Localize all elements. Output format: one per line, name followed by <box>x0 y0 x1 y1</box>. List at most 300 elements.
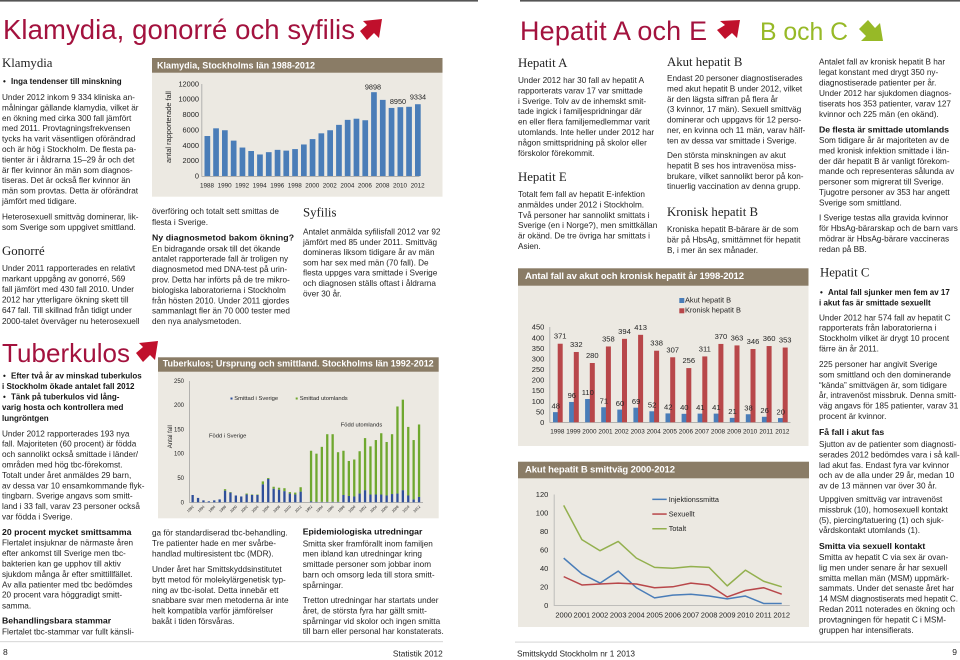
text block: Epidemiologiska utredningar: Tretton utredningar har startats under <box>303 596 439 605</box>
panel: Akut hepatit B line chart: 2005 <box>646 610 663 619</box>
panel: Klamydia bar chart: 1988 <box>200 182 214 189</box>
text block: Akut hepatit B: ten av dessa var smittade i Sverige. <box>667 136 797 145</box>
text block: Hepatit C: smitta mellan män (MSM) uppmärk- <box>819 574 949 583</box>
panel: Tuberkulos bar chart: 1994 <box>197 505 206 513</box>
panel: Akut hepatit B line chart: 2009 <box>719 610 736 619</box>
panel: Klamydia bar chart: Klamydia, Stockholms län 1988-2012 <box>157 61 315 71</box>
text block: Klamydia <box>1 56 139 232</box>
text block: Ny diagnosmetod: biologiska laboratorierna i Stockholm <box>152 286 286 295</box>
panel: Hepatit B bar chart: 69 <box>632 397 640 406</box>
text block: Hepatit A: förskolor förekommit. <box>518 149 594 158</box>
text block: Tuberkulos: bakterien kan ge upphov till aktiv <box>2 560 122 568</box>
panel: Tuberkulos bar chart: 2008 <box>391 505 400 513</box>
text block: Hepatit C: Sjutton av de patienter som diagnosti- <box>819 440 957 449</box>
panel: Klamydia bar chart: 1996 <box>270 182 285 189</box>
text block: Hepatit C: lad akut fas. Endast fyra var kvinnor <box>819 461 949 470</box>
panel: Hepatit B bar chart: Kronisk hepatit B <box>685 306 741 315</box>
panel: Tuberkulos bar chart: 200 <box>174 403 185 409</box>
text block: Gonorré: Under 2011 rapporterades en relativt <box>2 264 136 273</box>
text block: Kronisk hepatit B: bär på HbsAg, smittämnet för hepatit <box>667 234 801 244</box>
panel: Klamydia bar chart: 10000 <box>178 95 199 104</box>
text block: Hepatit C: provtagningen för hepatit C i MSM- <box>819 615 946 624</box>
text block: tbc-behandling: Tre patienter hade en mer svårbe- <box>152 538 276 548</box>
panel: Hepatit B bar chart: 450 <box>532 323 544 332</box>
text block: Hepatit E: är okänd. De tre övriga har smittats i <box>518 232 650 241</box>
panel: Klamydia bar chart: 4000 <box>183 141 199 150</box>
panel: Tuberkulos bar chart: 2004 <box>251 505 260 513</box>
text block: kronisk hepatit B, smittade utomlands: Under 2012 har sjukdomen diagnos- <box>819 89 952 98</box>
text block: Gonorré: fall jämfört med 430 fall 2010. Under <box>2 285 134 294</box>
text block: Ny diagnosmetod: den nya analysmetoden. <box>152 317 241 326</box>
panel: Hepatit B bar chart: 311 <box>699 344 711 353</box>
text block: kronisk hepatit B, smittade utomlands: der där hepatit B är vanligt förekom- <box>819 157 950 166</box>
text block: Epidemiologiska utredningar <box>303 527 444 636</box>
panel: Hepatit B bar chart: 394 <box>618 327 631 336</box>
text block: Hepatit C: Under 2012 har 574 fall av hepatit C <box>819 313 951 322</box>
text block: tbc-behandling <box>152 529 289 626</box>
panel: Klamydia bar chart <box>152 58 442 197</box>
text block: Tuberkulos: • <box>3 372 6 381</box>
text block: Tuberkulos: Flertalet tbc-stammar var fullt känsli- <box>2 628 134 637</box>
text block: Syfilis: som har sex med män (70 fall). De <box>303 258 429 267</box>
text block: kronisk hepatit B, smittade utomlands: för HbsAg-bärarskap och de barn vars <box>819 224 958 233</box>
panel: Akut hepatit B line chart: 2012 <box>773 610 790 619</box>
text block: Hepatit C: (5), piercing/tatuering (1) och sjuk- <box>819 516 944 525</box>
text block: tbc-behandling: ga för standardiserad tbc-behandling. <box>152 529 288 538</box>
text block: Ny diagnosmetod: diagnosmetod med DNA-test på urin- <box>152 264 287 274</box>
panel: Akut hepatit B line chart: 2008 <box>701 610 717 619</box>
text block: kronisk hepatit B, smittade utomlands: De flesta är smittade utomlands <box>819 124 949 134</box>
text block: Tuberkulos: områden med hög tbc-förekomst. <box>2 460 123 470</box>
panel: Tuberkulos bar chart: Smittad utomlands <box>300 396 348 402</box>
panel: Hepatit B bar chart: 40 <box>680 403 689 412</box>
text block: Hepatit C: och av de alla under 29 år, medan 10 <box>819 470 955 480</box>
panel: Hepatit B bar chart: 38 <box>744 404 753 412</box>
panel: Tuberkulos bar chart: 2012 <box>413 505 421 513</box>
text block: Kronisk hepatit B: Kronisk hepatit B <box>667 205 758 219</box>
panel: Hepatit B bar chart: 2002 <box>614 429 629 436</box>
panel: Hepatit B bar chart: 300 <box>532 354 544 364</box>
text block: Kronisk hepatit B: B, i mer än sex månader. <box>667 245 758 255</box>
text block: Akut hepatit B <box>667 55 805 191</box>
panel: Akut hepatit B line chart: 40 <box>540 564 548 573</box>
text block: Klamydia: Inga tendenser till minskning <box>11 77 122 86</box>
text block: Hepatit C: vårdskontakt utomlands (1). <box>819 525 920 535</box>
text block: Hepatit C: Antal fall sjunker men fem av 17 <box>828 288 950 297</box>
text block: Hepatit A: tade ingick i familjespridningar där <box>518 107 642 116</box>
text block: Tuberkulos: fall. Majoriteten (60 procent) är födda <box>2 440 137 449</box>
panel: Tuberkulos bar chart <box>158 357 439 518</box>
panel: Tuberkulos bar chart: 2006 <box>262 505 270 513</box>
text block: Gonorré: 2000-talet överväger nu heterosexuell <box>2 317 140 326</box>
text block: Gonorré: Gonorré <box>2 244 45 258</box>
panel: Hepatit B bar chart: 60 <box>616 399 624 408</box>
text block: Tuberkulos: sjukdom många år efter smittillfället. <box>2 569 133 579</box>
icon: red up arrow hepatitis <box>717 20 740 39</box>
text block: Hepatit C: färre än år 2011. <box>819 344 879 354</box>
panel: Klamydia bar chart: 1990 <box>218 182 232 189</box>
text block: kronisk hepatit B, smittade utomlands: kvinnor och 225 män (en okänd). <box>819 110 939 119</box>
panel: Akut hepatit B line chart: Totalt <box>669 524 686 533</box>
panel: Hepatit B bar chart: 353 <box>779 336 792 344</box>
text block: Gonorré <box>2 244 140 326</box>
text block: Tuberkulos: Tänk på tuberkulos vid lång- <box>11 393 120 402</box>
panel: Klamydia bar chart: 2000 <box>305 182 320 189</box>
text block: Hepatit E: Totalt fem fall av hepatit E-infektion <box>518 190 645 199</box>
text block: Ny diagnosmetod: överföring och totalt sett smittas de <box>152 207 279 216</box>
text block: Hepatit C: Stockholm vilket är drygt 10 procent <box>819 334 950 343</box>
panel: Klamydia bar chart: 2010 <box>393 182 407 189</box>
text block: Epidemiologiska utredningar: men ibland kan utredningar kring <box>303 550 422 559</box>
text block: Kronisk hepatit B <box>667 205 801 255</box>
panel: Hepatit B bar chart: 100 <box>532 397 544 406</box>
text block: tbc-behandling: snabbare svar men metoderna är inte <box>152 596 289 605</box>
panel: Akut hepatit B line chart: Injektionssmitta <box>669 495 720 504</box>
text block: Hepatit C: i akut fas är smittade sexuellt <box>819 299 931 308</box>
text block: kronisk hepatit B, smittade utomlands: Som tidigare år är majoriteten av de <box>819 135 950 145</box>
panel: Tuberkulos bar chart: 2000 <box>348 505 356 513</box>
text block: Tuberkulos: • <box>3 393 6 402</box>
text block: Hepatit C: serades 2012 bedömdes vara i så kall- <box>819 449 960 459</box>
heading: Tuberkulos: Tuberkulos <box>2 338 130 368</box>
text block: Hepatit A <box>518 56 654 158</box>
panel: Hepatit B bar chart: Akut hepatit B <box>685 295 731 304</box>
panel: Hepatit B bar chart: 110 <box>582 388 594 397</box>
panel: Hepatit B bar chart: 48 <box>551 401 560 410</box>
text block: Klamydia: målningar gällande klamydia, vilket är <box>2 102 139 112</box>
panel: Hepatit B bar chart: 332 <box>570 340 583 349</box>
text block: Hepatit C: 225 personer har angivit Sverige <box>819 360 938 369</box>
text block: tbc-behandling: helt kompatibla varför jämförelser <box>152 607 273 616</box>
text block: Hepatit C: gruppen har intensifierats. <box>819 626 914 635</box>
panel: Klamydia bar chart: 9898 <box>365 82 381 91</box>
panel: Akut hepatit B line chart: 60 <box>540 546 548 554</box>
footer: Statistik 2012: Statistik 2012 <box>393 649 443 659</box>
panel: Akut hepatit B line chart: 0 <box>544 601 548 610</box>
panel: Hepatit B bar chart: 71 <box>600 396 608 406</box>
text block: Klamydia: som Sverige som uppgivet smittland. <box>2 223 136 232</box>
panel: Hepatit B bar chart <box>518 268 808 446</box>
panel: Klamydia bar chart: 12000 <box>178 79 199 88</box>
panel: Hepatit B bar chart: 280 <box>586 351 599 360</box>
text block: Hepatit E: Sverige (en i Norge?), men smittkällan <box>518 221 658 230</box>
panel: Tuberkulos bar chart: Smittad i Sverige <box>234 396 278 402</box>
panel: Hepatit B bar chart: 2000 <box>582 429 597 436</box>
text block: Kronisk hepatit B: Kroniska hepatit B-bärare är de som <box>667 225 799 234</box>
panel: Akut hepatit B line chart: 120 <box>536 490 548 499</box>
text block: Tuberkulos: 20 procent vara höggradigt smitt- <box>2 591 122 600</box>
text block: tbc-behandling: bakåt i tiden försvåras. <box>152 616 234 626</box>
text block: Akut hepatit B: Den största minskningen av akut <box>667 151 787 160</box>
text block: Klamydia: tiseras. Det är också fler kvinnor än <box>2 175 131 185</box>
text block: Akut hepatit B: Endast 20 personer diagnostiserades <box>667 74 803 83</box>
text block: Tuberkulos: Av alla patienter med tbc bedömdes <box>2 580 132 589</box>
text block: Ny diagnosmetod: prov. Detta har införts på de tre mikro- <box>152 274 290 284</box>
panel: Hepatit B bar chart: 371 <box>554 332 567 341</box>
panel: Hepatit B bar chart: 96 <box>568 391 576 400</box>
panel: Akut hepatit B line chart: 100 <box>536 508 548 518</box>
panel: Hepatit B bar chart: 400 <box>532 333 544 342</box>
panel: Hepatit B bar chart: 2007 <box>695 429 709 436</box>
panel: Klamydia bar chart: 2008 <box>375 182 390 189</box>
panel: Tuberkulos bar chart: 2008 <box>273 505 281 513</box>
panel: Tuberkulos bar chart: 2002 <box>359 505 367 513</box>
panel: Tuberkulos bar chart: 2000 <box>229 505 238 513</box>
title: Hepatit A och E: Hepatit A och E <box>520 16 707 46</box>
text block: Hepatit A: rapporterats varav 17 var smittade <box>518 86 643 95</box>
text block: Hepatit A: någon smittspridning på skolor eller <box>518 137 647 147</box>
text block: Tuberkulos: varig hosta och kontrollera med <box>2 403 123 412</box>
panel: Klamydia bar chart: 2012 <box>411 182 425 189</box>
panel: Hepatit B bar chart: 150 <box>532 386 544 395</box>
text block: Tuberkulos: Efter två år av minskad tuberkulos <box>11 372 142 381</box>
text block: Tuberkulos: Behandlingsbara stammar <box>2 616 112 626</box>
text block: kronisk hepatit B, smittade utomlands: med kronisk infektion smittade i län- <box>819 146 949 155</box>
panel: Hepatit B bar chart: 363 <box>731 333 743 342</box>
text block: Tuberkulos: efter ankomst till Sverige men tbc- <box>2 549 126 558</box>
panel: Akut hepatit B line chart: 20 <box>540 582 548 592</box>
text block: kronisk hepatit B, smittade utomlands: Antalet fall av kronisk hepatit B har <box>819 58 945 67</box>
text block: kronisk hepatit B, smittade utomlands: mande och representeras sålunda av <box>819 166 955 176</box>
text block: Ny diagnosmetod: antalet rapporterade fall är troligen ny <box>152 255 289 264</box>
panel: Hepatit B bar chart: 2001 <box>598 429 613 436</box>
text block: Hepatit C <box>819 266 960 635</box>
text block: Ny diagnosmetod: sammanlagt fler än 70 000 tester med <box>152 307 290 316</box>
text block: Hepatit C: Redan 2011 noterades en ökning och <box>819 605 955 614</box>
panel: Hepatit B bar chart: Antal fall av akut och kronisk hepatit år 1998-2012 <box>525 271 744 282</box>
text block: Hepatit C: Smitta via sexuell kontakt <box>819 541 925 551</box>
panel: Tuberkulos bar chart: 2012 <box>294 505 303 513</box>
panel: Hepatit B bar chart: 360 <box>763 334 775 343</box>
title: B och C: B och C <box>760 19 848 46</box>
panel: Tuberkulos bar chart: Född utomlands <box>341 423 382 429</box>
text block: Hepatit A: i Sverige. Tolv av de inhemskt smit- <box>518 97 646 106</box>
text block: Klamydia: jämfört med tidigare. <box>1 197 77 206</box>
panel: Tuberkulos bar chart: 1998 <box>337 505 346 513</box>
text block: kronisk hepatit B, smittade utomlands: legat konstant med drygt 350 ny- <box>819 68 939 77</box>
text block: Tuberkulos: samma. <box>2 601 31 610</box>
text block: Gonorré: 2012 har ytterligare ökning skett till <box>2 296 129 305</box>
text block: kronisk hepatit B, smittade utomlands: mödrar är HbsAg-bärare vaccineras <box>819 234 949 244</box>
text block: Klamydia: tycks ha varit väsentligen oförändrad <box>2 135 136 144</box>
text block: Hepatit A: Under 2012 har 30 fall av hepatit A <box>518 76 645 85</box>
text block: Hepatit C: Smitta av hepatit C via sex är ovan- <box>819 553 949 562</box>
panel: Hepatit B bar chart: 2004 <box>647 429 661 436</box>
text block: Tuberkulos: och sannolikt också smittade i länder/ <box>2 449 139 459</box>
panel: Akut hepatit B line chart: 2004 <box>628 610 645 619</box>
text block: Gonorré: 647 fall. Till skillnad från tidigt under <box>2 305 132 315</box>
text block: Akut hepatit B: med akut hepatit B under 2012, vilket <box>667 84 803 93</box>
panel: Hepatit B bar chart: 338 <box>650 339 663 348</box>
panel: Klamydia bar chart: 0 <box>195 172 199 181</box>
panel: Tuberkulos bar chart: Antal fall <box>168 425 174 448</box>
panel: Hepatit B bar chart: 21 <box>728 407 737 416</box>
text block: Akut hepatit B: (3 kvinnor, 17 män). Sexuell smittväg <box>667 105 802 114</box>
panel: Hepatit B bar chart: 256 <box>682 356 695 365</box>
text block: Tuberkulos: i Stockholm ökade antalet fall 2012 <box>2 382 135 391</box>
panel: Klamydia bar chart: 2004 <box>340 182 355 189</box>
panel: Tuberkulos bar chart: 1992 <box>305 505 313 513</box>
footer: Smittskydd Stockholm: Smittskydd Stockholm nr 1 2013 <box>517 649 635 659</box>
text block: Tuberkulos: Flertalet insjuknar de närmaste åren <box>2 538 134 548</box>
text block: Klamydia: Heterosexuell smittväg dominerar, lik- <box>2 213 139 222</box>
panel: Hepatit B bar chart: 0 <box>540 418 544 427</box>
panel: Hepatit B bar chart: 2008 <box>711 429 726 436</box>
text block: Akut hepatit B: ner, en kvinna och 11 män, varav hälf- <box>667 126 805 135</box>
panel: Hepatit B bar chart: 42 <box>664 403 672 412</box>
text block: Akut hepatit B: brukare, vilket sannolikt beror på kon- <box>667 171 804 181</box>
text block: Akut hepatit B: dominerar och uppgavs för 12 perso- <box>667 116 802 125</box>
title: Klamydia, gonorré och syfilis: Klamydia, gonorré och syfilis <box>3 14 355 45</box>
text block: Epidemiologiska utredningar: Epidemiologiska utredningar <box>303 527 423 537</box>
text block: Ny diagnosmetod: flesta i Sverige. <box>152 218 208 227</box>
text block: tbc-behandling: handlad multiresistent tbc (MDR). <box>152 550 274 558</box>
panel: Klamydia bar chart: 6000 <box>183 125 199 134</box>
text block: Klamydia: Under 2012 inkom 9 334 kliniska an- <box>2 93 135 102</box>
text block: Akut hepatit B: hepatit B ses hos intravenösa miss- <box>667 161 797 170</box>
text block: Hepatit C: “kända” smittvägen är, som tidigare <box>819 381 947 390</box>
icon: red arrow tuberkulos <box>136 341 158 362</box>
panel: Tuberkulos bar chart: 2002 <box>240 505 249 513</box>
panel: Akut hepatit B line chart: 2010 <box>737 610 754 619</box>
text block: Syfilis: och diagnosen ställs oftast i åldrarna <box>303 278 436 288</box>
text block: Tuberkulos <box>2 372 145 637</box>
text block: Epidemiologiska utredningar: Smitta sker framförallt inom familjen <box>303 539 433 548</box>
text block: Syfilis: Antalet anmälda syfilisfall 2012 var 92 <box>303 228 441 236</box>
panel: Akut hepatit B line chart: 2001 <box>574 610 590 619</box>
panel: Tuberkulos bar chart: 50 <box>177 476 185 482</box>
footer: page 8: 8 <box>3 647 8 657</box>
text block: kronisk hepatit B, smittade utomlands <box>819 58 958 254</box>
text block: Hepatit A: utomlands. Inte heller under 2012 har <box>518 128 654 137</box>
text block: Hepatit C: sammats. Under det senaste året har <box>819 583 954 593</box>
text block: Hepatit C: lig men under senare år har sexuell <box>819 562 948 572</box>
text block: Epidemiologiska utredningar: spårningar. <box>303 580 343 590</box>
text block: Hepatit C: av de 13 männen var över 30 år. <box>819 481 937 491</box>
panel: Hepatit B bar chart: 2009 <box>727 429 742 436</box>
text block: kronisk hepatit B, smittade utomlands: personer som migrerat till Sverige. <box>819 178 944 187</box>
text block: Hepatit E: Asien. <box>518 242 541 251</box>
panel: Tuberkulos bar chart: Tuberkulos; Ursprung och smittland. Stockholms län 1992-2012 <box>163 359 434 369</box>
text block: Epidemiologiska utredningar: till barn eller personal har konstaterats. <box>303 627 444 636</box>
text block: Akut hepatit B: är den lägsta siffran på flera år <box>667 94 778 104</box>
text block: Klamydia: en ökning med cirka 300 fall jämfört <box>2 114 132 123</box>
text block: Hepatit C: 14 MSM diagnostiserats med hepatit C. <box>819 595 958 604</box>
text block: Klamydia: och är hög i Stockholm. De flesta pa- <box>2 145 137 154</box>
text block: Epidemiologiska utredningar: barn och omsorg leda till stora smitt- <box>303 570 435 580</box>
panel: Tuberkulos bar chart: 1998 <box>219 505 227 513</box>
panel: Hepatit B bar chart: 370 <box>715 332 727 341</box>
text block: tbc-behandling: bytt metod för molekylärgenetisk typ- <box>152 575 286 584</box>
text block: Hepatit E: anmäldes under 2012 i Stockholm. <box>518 200 644 209</box>
text block: Klamydia: • <box>3 77 6 86</box>
panel: Hepatit B bar chart: 346 <box>747 337 759 346</box>
panel: Tuberkulos bar chart: 2006 <box>380 505 389 513</box>
text block: Tuberkulos: var födda i Sverige. <box>2 513 73 522</box>
text block: Hepatit E: Hepatit E <box>518 170 567 184</box>
text block: Tuberkulos: av dessa var 10 ensamkommande flyk- <box>2 481 145 490</box>
text block: Hepatit C: Få fall i akut fas <box>819 427 884 437</box>
text block: Klamydia: Klamydia <box>2 56 53 70</box>
panel: Klamydia bar chart: 2006 <box>358 182 372 189</box>
footer: page 9: 9 <box>952 647 957 657</box>
icon: green down arrow <box>859 20 883 41</box>
text block: Syfilis: över 30 år. <box>303 288 342 298</box>
panel: Hepatit B bar chart: 2011 <box>759 429 774 436</box>
panel: Tuberkulos bar chart: 1996 <box>208 505 216 513</box>
panel: Hepatit B bar chart: 26 <box>760 406 769 415</box>
panel: Hepatit B bar chart: 50 <box>536 407 544 416</box>
text block: Epidemiologiska utredningar: spårningar vid skolor och ingen smitta <box>303 616 441 626</box>
panel: Akut hepatit B line chart: 2003 <box>610 610 627 619</box>
panel: Tuberkulos bar chart: 1994 <box>316 505 324 513</box>
panel: Hepatit B bar chart: 52 <box>648 400 656 410</box>
panel: Klamydia bar chart: 1994 <box>253 182 267 189</box>
text block: Hepatit E <box>518 170 658 251</box>
text block: Ny diagnosmetod <box>152 207 294 326</box>
text block: Hepatit C: procent är kvinnor. <box>819 412 886 421</box>
panel: Hepatit B bar chart: 307 <box>666 345 679 354</box>
panel: Klamydia bar chart: antal rapporterade fall <box>164 91 173 163</box>
text block: Klamydia: tienter är i åldrarna 15–29 år och det <box>2 154 135 164</box>
text block: kronisk hepatit B, smittade utomlands: tiserats hos 353 patienter, varav 127 <box>819 99 951 108</box>
text block: kronisk hepatit B, smittade utomlands: Sverige som smittland. <box>819 198 902 207</box>
panel: Tuberkulos bar chart: 2010 <box>283 505 292 513</box>
panel: Akut hepatit B line chart <box>518 462 809 627</box>
text block: Tuberkulos: tingbarn. Sverige angavs som smitt- <box>2 492 133 501</box>
text block: Syfilis <box>302 206 441 298</box>
panel: Hepatit B bar chart: 2010 <box>743 429 758 436</box>
panel: Hepatit B bar chart: 200 <box>532 376 544 385</box>
panel: Akut hepatit B line chart: 2007 <box>683 610 699 619</box>
panel: Tuberkulos bar chart: Född i Sverige <box>209 433 246 439</box>
panel: Klamydia bar chart: 8950 <box>390 97 406 106</box>
text block: Hepatit C: missbruk (10), homosexuell kontakt <box>819 505 949 514</box>
text block: Hepatit E: Två personer har sannolikt smittats i <box>518 210 650 220</box>
text block: Hepatit A: Hepatit A <box>518 56 568 70</box>
icon: red up arrow <box>360 19 382 40</box>
panel: Hepatit B bar chart: 2012 <box>775 429 790 436</box>
panel: Hepatit B bar chart: 350 <box>532 344 544 353</box>
panel: Akut hepatit B line chart: 2002 <box>592 610 608 619</box>
panel: Klamydia bar chart: 2002 <box>323 182 337 189</box>
panel: Akut hepatit B line chart: Sexuellt <box>669 510 695 518</box>
text block: Klamydia: med 2011. Provtagningsfrekvensen <box>2 124 131 133</box>
text block: Ny diagnosmetod: Ny diagnosmetod bakom ökning? <box>152 233 294 243</box>
panel: Hepatit B bar chart: 413 <box>634 323 647 332</box>
text block: Tuberkulos: lungröntgen <box>2 414 49 423</box>
text block: Syfilis: flesta uppges vara smittade i Sverige <box>303 269 438 278</box>
panel: Klamydia bar chart: 9334 <box>410 92 426 101</box>
text block: Syfilis: jämfört med 85 under 2011. Smittväg <box>302 238 438 247</box>
text block: Akut hepatit B: Akut hepatit B <box>667 55 742 69</box>
text block: Klamydia: män som provtas. Detta är oförändrat <box>2 187 139 196</box>
panel: Tuberkulos bar chart: 150 <box>174 427 185 433</box>
text block: Hepatit C: som smittland och den dominerande <box>819 370 951 379</box>
panel: Hepatit B bar chart: 2005 <box>663 429 677 436</box>
panel: Hepatit B bar chart: 1999 <box>566 429 581 436</box>
text block: Hepatit C: Hepatit C <box>820 266 869 280</box>
text block: Klamydia: är fler kvinnor än män som diagnos- <box>2 166 133 175</box>
text block: Syfilis: domineras liksom tidigare år av män <box>303 247 435 257</box>
panel: Tuberkulos bar chart: 250 <box>174 379 185 385</box>
panel: Klamydia bar chart: 2000 <box>183 156 199 165</box>
text block: Hepatit C: rapporterats från laboratorierna i <box>819 323 937 333</box>
text block: Hepatit C: år, intravenöst missbruk. Denna smitt- <box>819 390 957 400</box>
text block: kronisk hepatit B, smittade utomlands: I Sverige testas alla gravida kvinnor <box>819 214 949 223</box>
panel: Tuberkulos bar chart: 100 <box>174 452 185 458</box>
panel: Hepatit B bar chart: 250 <box>532 365 544 374</box>
